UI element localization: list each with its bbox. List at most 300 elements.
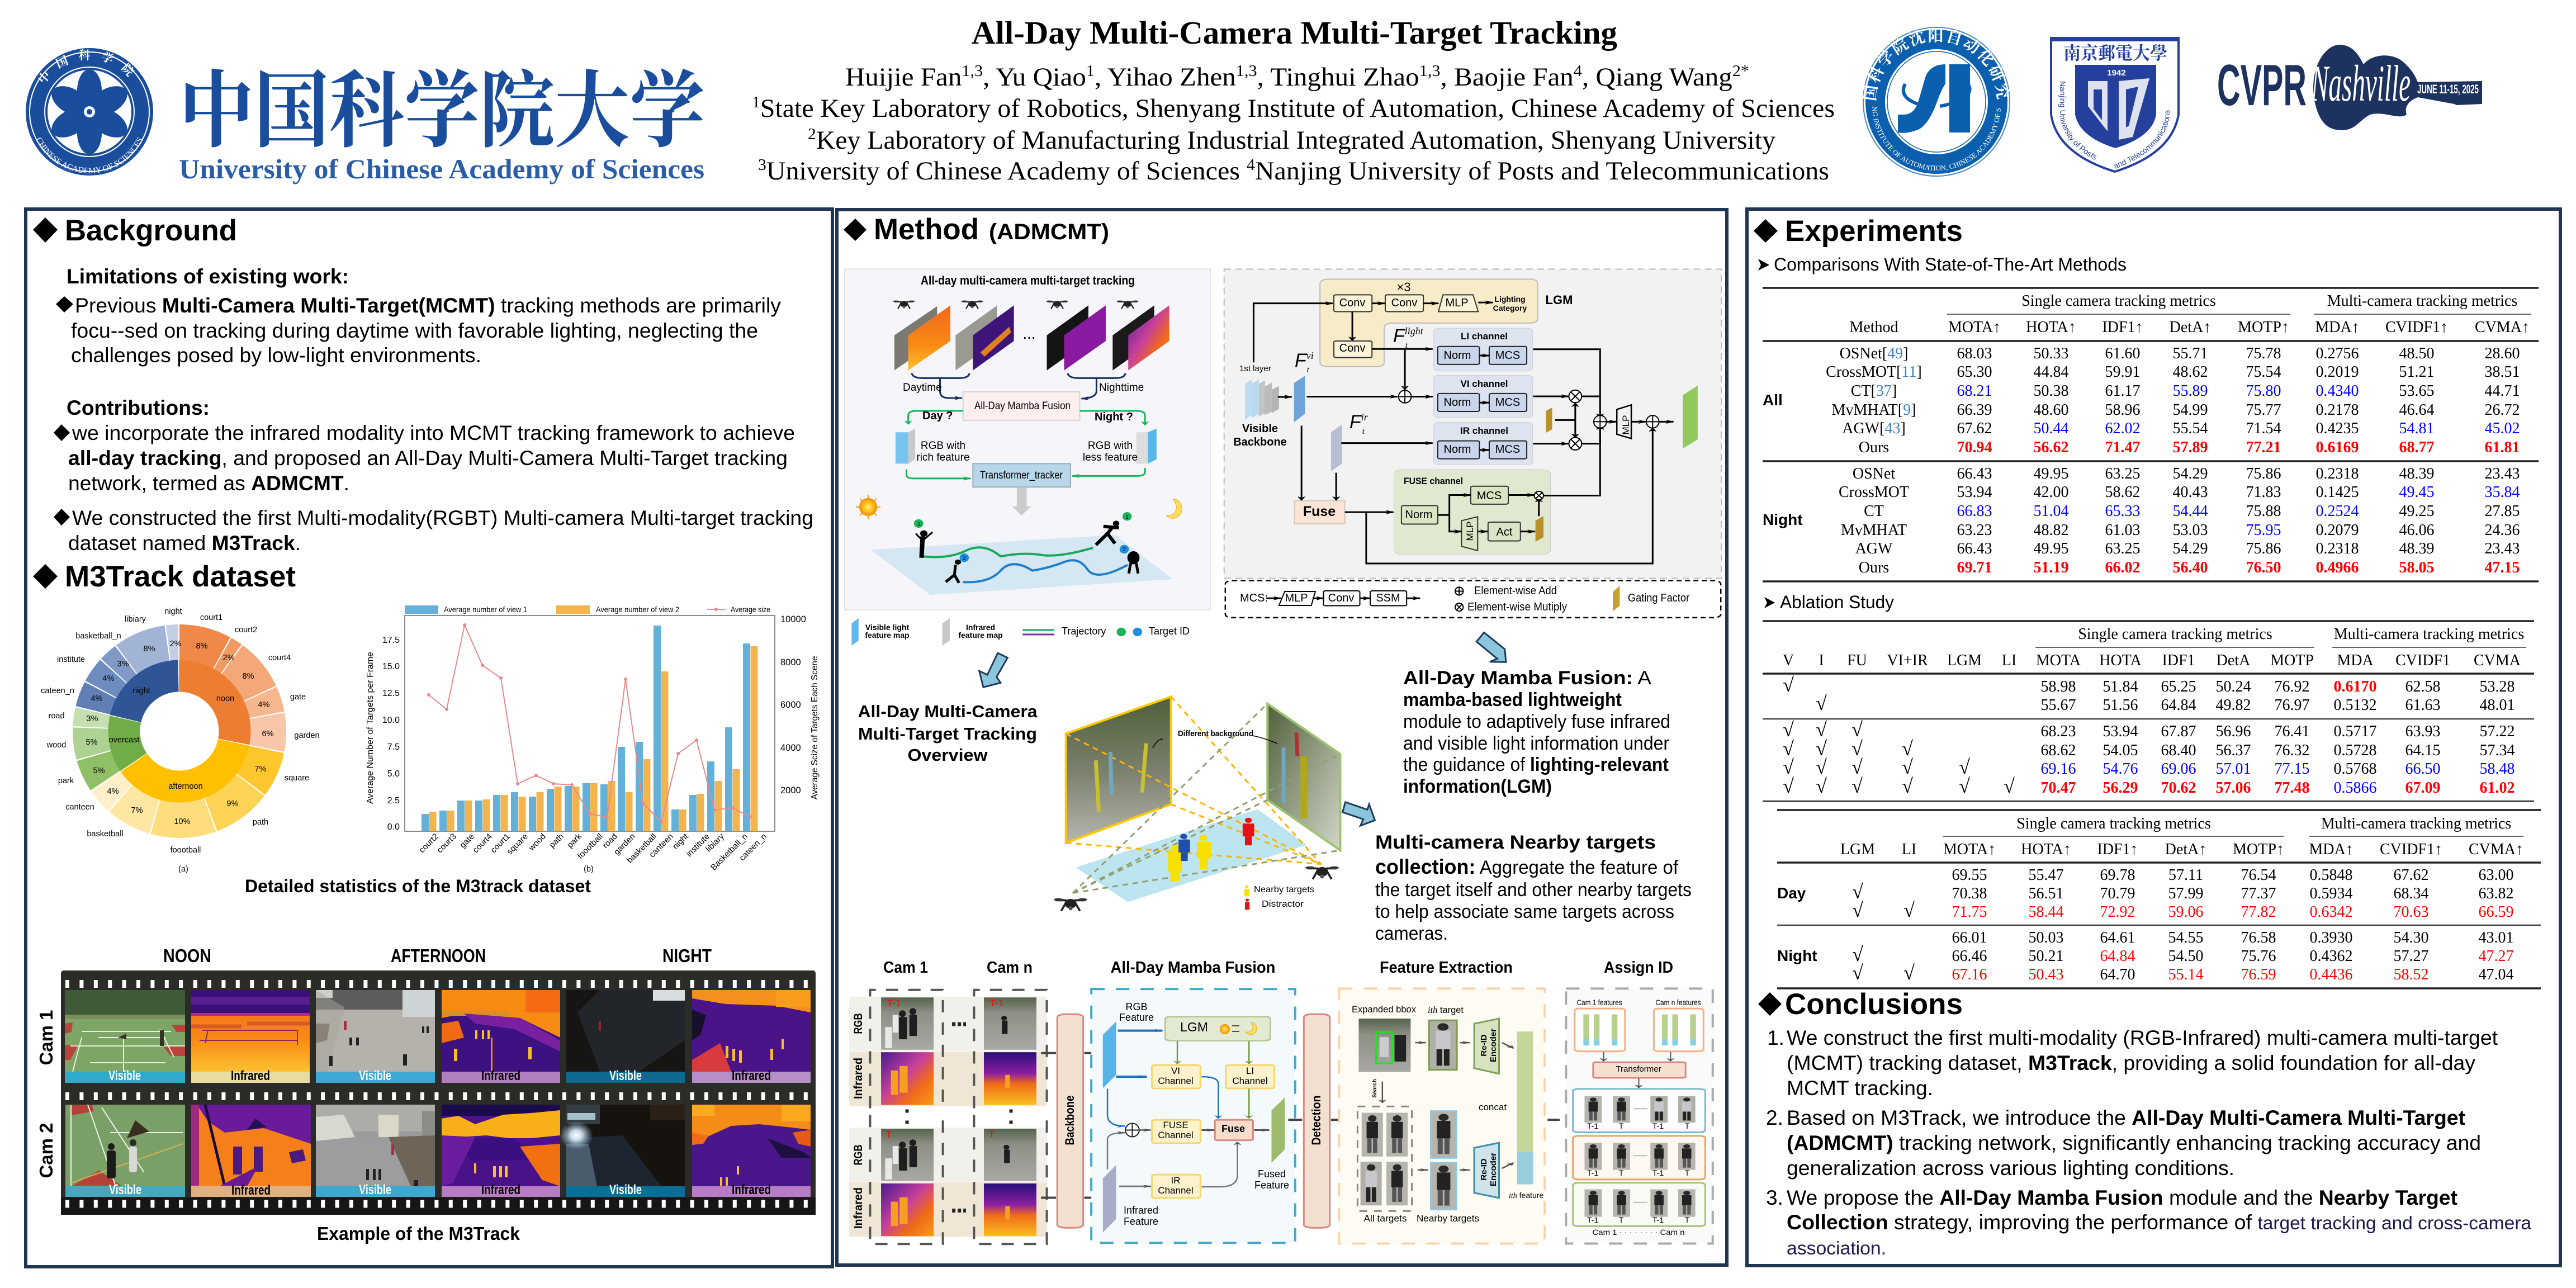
table: comparisons with state of the art: Night xyxy=(1763,511,1803,528)
affiliation 3 and 4: 3 xyxy=(758,156,766,174)
chart: scene donut: court1 xyxy=(200,613,222,622)
text: mamba fusion description: module to adaptively fuse infrared xyxy=(1403,711,1670,732)
table: comparisons with state of the art: 66.43 xyxy=(1957,465,1992,482)
chart: scene donut: night xyxy=(132,686,150,695)
table: comparisons with state of the art: CrossMOT[11] xyxy=(1826,363,1922,381)
chart: scene donut: noon xyxy=(216,694,234,703)
text: conclusions list: 1. xyxy=(1767,1026,1784,1049)
table: comparisons with state of the art: 50.38 xyxy=(2034,382,2068,400)
table: comparisons with state of the art: CVIDF1↑ xyxy=(2385,319,2448,336)
table: ablation study: 70.62 xyxy=(2161,779,2196,797)
chart: targets per scene bars: night xyxy=(671,831,690,851)
table: day and night: 54.55 xyxy=(2168,929,2204,946)
table: comparisons with state of the art: 66.83 xyxy=(1957,503,1992,520)
table: day and night: √ xyxy=(1852,943,1863,965)
chart: scene donut: court4 xyxy=(268,654,291,662)
chart: scene donut: 10% xyxy=(174,817,191,826)
table: day and night: √ xyxy=(1852,899,1863,921)
diagram: nearby targets geometry: Different background xyxy=(1178,729,1253,738)
diagram: all-day overview: rich feature xyxy=(916,452,970,463)
table: day and night: LGM xyxy=(1840,841,1875,858)
diagram: network architecture: Lighting xyxy=(1494,295,1526,304)
table: day and night: √ xyxy=(1903,899,1915,921)
table: comparisons with state of the art: 53.03 xyxy=(2172,522,2208,539)
text: mamba fusion description xyxy=(1403,667,1670,797)
table: comparisons with state of the art: 51.04 xyxy=(2034,503,2068,520)
photo: cam 1 afternoon infrared: Infrared xyxy=(481,1068,520,1083)
table: day and night: 71.75 xyxy=(1952,903,1987,921)
table: comparisons with state of the art: 38.51 xyxy=(2484,363,2520,381)
text: conclusions list: generalization across various lighting conditions. xyxy=(1787,1157,2234,1180)
table: comparisons with state of the art: 75.54 xyxy=(2246,363,2281,381)
table: day and night: 66.59 xyxy=(2479,903,2513,921)
diagram: feature extraction: Re-ID xyxy=(1479,1158,1489,1181)
chart: scene donut: 4% xyxy=(91,694,103,703)
table: comparisons with state of the art: Multi-camera tracking metrics xyxy=(2327,292,2517,310)
table: comparisons with state of the art: 58.96 xyxy=(2105,401,2140,419)
header xyxy=(26,15,2482,186)
chart: targets per scene bars xyxy=(366,605,820,874)
heading: Method xyxy=(844,213,1109,246)
column labels: time of day: NOON xyxy=(163,945,211,966)
text: nearby targets description: collection: Aggregate the feature of xyxy=(1375,855,1679,878)
affiliation 2: 2 xyxy=(808,125,816,143)
diagram: network architecture: LI channel xyxy=(1461,331,1508,342)
diagram: feature extraction: Expanded bbox xyxy=(1352,1004,1416,1015)
photo: cam 2 noon visible xyxy=(65,1105,185,1197)
table: comparisons with state of the art: 75.88 xyxy=(2246,503,2281,520)
chart: targets per scene bars: court1 xyxy=(489,832,512,855)
affiliation 3 and 4: University of Chinese Academy of Sciences xyxy=(766,157,1247,186)
table: comparisons with state of the art: CrossMOT xyxy=(1839,484,1909,501)
diagram: network architecture: Conv xyxy=(1339,297,1365,309)
photo: cam 1 night infrared: Infrared xyxy=(732,1068,771,1083)
logo: Nanjing University of Posts and Telecommunications: Nanjing University of Posts xyxy=(2058,82,2096,160)
table: ablation study: √ xyxy=(1852,718,1863,741)
table: comparisons with state of the art: 44.84 xyxy=(2034,363,2068,381)
table: ablation study: 48.01 xyxy=(2480,697,2515,714)
chart: scene donut: overcast xyxy=(109,736,139,745)
table: comparisons with state of the art: 24.36 xyxy=(2484,522,2520,539)
table: ablation study: √ xyxy=(1959,756,1970,778)
photo: cam 2 night visible xyxy=(560,1105,685,1197)
diagram: all-day overview: less feature xyxy=(1083,452,1138,463)
table: day and night: 0.5934 xyxy=(2310,885,2352,902)
arrow: to overview xyxy=(979,653,1007,687)
table: ablation study: 65.25 xyxy=(2161,678,2196,695)
table: day and night: 67.62 xyxy=(2394,866,2428,884)
column labels: time of day: NIGHT xyxy=(662,945,712,966)
table: comparisons with state of the art: 67.62 xyxy=(1957,420,1992,437)
logo: Nanjing University of Posts and Telecommunications: 南京郵電大學 xyxy=(2063,43,2167,63)
text: mamba fusion description: the guidance of lighting-relevant xyxy=(1403,754,1669,775)
table: comparisons with state of the art: CT[37] xyxy=(1851,382,1897,400)
diagram: feature extraction: concat xyxy=(1479,1102,1507,1112)
logo: UCAS emblem: 中国科学院 xyxy=(38,49,134,82)
table: comparisons with state of the art: Ours xyxy=(1859,559,1889,576)
table: ablation study: 50.24 xyxy=(2216,678,2251,695)
table: comparisons with state of the art: 0.2524 xyxy=(2315,503,2359,520)
authors: , Tinghui Zhao xyxy=(1257,63,1419,92)
table: comparisons with state of the art: 70.94 xyxy=(1957,439,1992,456)
table: day and night: 69.78 xyxy=(2100,866,2135,884)
table: ablation study: 68.62 xyxy=(2040,742,2076,759)
table: day and night: √ xyxy=(1903,962,1915,984)
diagram: network architecture: Category xyxy=(1493,304,1527,312)
table: ablation study: 57.22 xyxy=(2480,723,2515,740)
text: contributions: dataset named M3Track. xyxy=(68,532,301,555)
chart: targets per scene bars: 4000 xyxy=(780,743,801,753)
table: ablation study: 57.06 xyxy=(2216,779,2251,797)
table: comparisons with state of the art: MvMHAT xyxy=(1841,522,1907,539)
diagram: network architecture: Norm xyxy=(1444,396,1471,409)
column labels: time of day xyxy=(163,945,712,966)
subheading: ablation study: Ablation Study xyxy=(1780,592,1894,612)
diagram: all-day overview: Infrared xyxy=(966,623,995,632)
table: ablation study: 51.56 xyxy=(2103,697,2138,714)
diagram: all-day overview xyxy=(845,269,1210,646)
table: ablation study: 68.23 xyxy=(2040,723,2076,740)
table: ablation study: 56.96 xyxy=(2216,723,2251,740)
chart: targets per scene bars: foootball xyxy=(576,832,605,861)
diagram: all-day overview: Target ID xyxy=(1149,626,1190,637)
table: day and night: 77.82 xyxy=(2241,903,2276,921)
diagram: assign ID: T xyxy=(1619,1121,1624,1130)
table: ablation study: 66.50 xyxy=(2405,760,2441,778)
chart: targets per scene bars: wood xyxy=(527,832,548,853)
table: ablation study: √ xyxy=(1816,756,1827,778)
table: comparisons with state of the art: Method xyxy=(1849,319,1898,336)
diagram: pipeline headings: Cam n xyxy=(987,959,1033,977)
diagram: assign ID: Cam 1 features xyxy=(1576,998,1622,1007)
table: day and night: 55.47 xyxy=(2028,866,2064,884)
table: ablation study: 76.32 xyxy=(2274,742,2310,759)
legend: MCS and operators: Conv xyxy=(1328,592,1354,604)
caption: detailed statistics: Detailed statistics of the M3track dataset xyxy=(245,876,591,896)
heading: Conclusions: Conclusions xyxy=(1785,988,1963,1021)
diagram: assign ID: T xyxy=(1685,1168,1690,1177)
text: conclusions list: (ADMCMT) tracking network, significantly enhancing tracking accuracy and xyxy=(1787,1131,2481,1154)
table: ablation study: 0.5728 xyxy=(2333,742,2377,759)
table: day and night: 57.27 xyxy=(2394,948,2428,965)
diagram: all-day overview: Nighttime xyxy=(1099,382,1144,394)
diagram: all-day mamba fusion: Channel xyxy=(1158,1185,1194,1196)
diagram: all-day mamba fusion: LI xyxy=(1246,1066,1254,1076)
diagram: network architecture: Norm xyxy=(1444,443,1471,456)
table: comparisons with state of the art: 68.77 xyxy=(2399,439,2434,456)
diagram: feature extraction: Re-ID xyxy=(1479,1034,1489,1057)
chart: targets per scene bars: 10000 xyxy=(780,614,806,624)
diagram: assign ID: T-1 xyxy=(1652,1215,1664,1224)
table: ablation study: √ xyxy=(1783,737,1794,760)
table: ablation study: 53.28 xyxy=(2480,678,2515,695)
diagram: nearby targets geometry: Nearby targets xyxy=(1254,885,1314,894)
table: comparisons with state of the art: 48.62 xyxy=(2172,363,2208,381)
chart: scene donut: 3% xyxy=(117,660,129,669)
table: day and night: 70.79 xyxy=(2100,885,2135,902)
diagram: network architecture: MCS xyxy=(1477,490,1502,502)
table: comparisons with state of the art: 49.45 xyxy=(2399,484,2434,501)
diagram: all-day overview: 1 xyxy=(1125,514,1129,520)
text: limitations of existing work: Limitations of existing work: xyxy=(67,265,349,288)
table: ablation study: 76.97 xyxy=(2274,697,2310,714)
chart: targets per scene bars: 6000 xyxy=(780,700,801,710)
chart: scene donut: (a) xyxy=(178,865,188,874)
diagram: input camera images xyxy=(849,990,1047,1244)
table: day and night: 47.27 xyxy=(2479,948,2513,965)
table: ablation study: IDF1 xyxy=(2162,652,2195,669)
diagram: all-day overview: feature map xyxy=(958,631,1003,640)
diagram: assign ID: Cam n features xyxy=(1656,998,1701,1007)
authors: 1,3 xyxy=(1236,62,1257,80)
table: ablation study: 0.5768 xyxy=(2333,760,2377,778)
table: comparisons with state of the art: Ours xyxy=(1859,439,1889,456)
table: comparisons with state of the art: 48.39 xyxy=(2399,465,2434,482)
chart: targets per scene bars: 17.5 xyxy=(382,636,400,645)
table: day and night: MOTA↑ xyxy=(1943,841,1996,858)
photo: cam 2 afternoon visible: Visible xyxy=(359,1182,391,1197)
chart: targets per scene bars: 15.0 xyxy=(382,662,400,671)
table: ablation study: 51.84 xyxy=(2103,678,2138,695)
chart: scene donut: 5% xyxy=(86,738,98,747)
table: comparisons with state of the art: 55.54 xyxy=(2172,420,2208,437)
table: ablation study: LI xyxy=(2002,652,2016,669)
table: comparisons with state of the art: OSNet[49] xyxy=(1840,345,1908,362)
table: comparisons with state of the art: 75.86 xyxy=(2246,465,2281,482)
photo: cam 2 noon infrared: Infrared xyxy=(231,1183,271,1198)
table: day and night: MDA↑ xyxy=(2309,841,2354,858)
diagram: pipeline headings: All-Day Mamba Fusion xyxy=(1110,959,1276,977)
table: day and night xyxy=(1777,810,2541,988)
table: day and night: 0.6342 xyxy=(2310,903,2352,921)
diagram: input camera images: RGB xyxy=(852,1013,865,1034)
table: comparisons with state of the art: 66.02 xyxy=(2105,559,2140,576)
chart: targets per scene bars: road xyxy=(601,832,619,850)
text: contributions: We constructed the first Multi-modality(RGBT) Multi-camera Multi-target tracking xyxy=(72,506,813,529)
diagram: all-day mamba fusion xyxy=(1091,989,1295,1243)
table: comparisons with state of the art: 61.03 xyxy=(2105,522,2140,539)
affiliation 2: Key Laboratory of Manufacturing Industrial Integrated Automation, Shenyang University xyxy=(816,126,1776,155)
table: ablation study: √ xyxy=(1902,756,1913,778)
diagram: network architecture: Act xyxy=(1497,526,1513,538)
text: conclusions list: We construct the first multi-modality (RGB-Infrared) multi-camera multi-target xyxy=(1787,1026,2498,1049)
table: comparisons with state of the art: 55.71 xyxy=(2172,345,2208,362)
legend: MCS and operators: MLP xyxy=(1285,592,1308,604)
diagram: network architecture: Visible xyxy=(1242,423,1278,435)
text: limitations of existing work: Previous Multi-Camera Multi-Target(MCMT) tracking methods are primarily xyxy=(75,294,782,317)
film strip: example images xyxy=(61,970,816,1215)
table: comparisons with state of the art: 53.94 xyxy=(1957,484,1992,501)
table: ablation study: 56.37 xyxy=(2216,742,2251,759)
diagram: assign ID: T xyxy=(1685,1215,1690,1224)
table: day and night: 70.38 xyxy=(1952,885,1987,902)
table: ablation study: 57.01 xyxy=(2216,760,2251,778)
table: day and night: 47.04 xyxy=(2479,966,2513,983)
table: comparisons with state of the art: 48.82 xyxy=(2034,522,2068,539)
table: ablation study: 67.09 xyxy=(2405,779,2441,797)
chart: scene donut: 8% xyxy=(243,672,254,681)
text: limitations of existing work xyxy=(56,265,782,367)
logo: Nanjing University of Posts and Telecommunications: and Telecommunications xyxy=(2114,110,2170,169)
panel: method xyxy=(837,210,1727,1265)
table: comparisons with state of the art: 26.72 xyxy=(2484,401,2520,419)
diagram: all-day overview: 2 xyxy=(963,555,966,561)
table: ablation study: 69.06 xyxy=(2161,760,2196,778)
text: mamba fusion description: All-Day Mamba Fusion: A xyxy=(1403,667,1651,689)
table: comparisons with state of the art: CT xyxy=(1864,503,1884,520)
text: mamba fusion description: and visible light information under xyxy=(1403,733,1669,754)
table: day and night: 63.00 xyxy=(2479,866,2513,884)
photo: cam 1 afternoon visible xyxy=(316,990,435,1083)
diagram: all-day mamba fusion: Channel xyxy=(1158,1076,1194,1086)
diagram: input camera images: T-1 xyxy=(887,998,901,1008)
diagram: feature extraction: ith target xyxy=(1428,1005,1464,1015)
chart: scene donut: 5% xyxy=(93,766,105,775)
table: day and night: 57.11 xyxy=(2168,866,2203,884)
table: day and night: 50.03 xyxy=(2028,929,2064,946)
chart: targets per scene bars: 7.5 xyxy=(387,742,400,752)
diagram: all-day mamba fusion: Channel xyxy=(1232,1076,1268,1086)
chart: targets per scene bars: institute xyxy=(684,832,712,859)
table: comparisons with state of the art: 0.4340 xyxy=(2315,382,2359,400)
chart: scene donut: 4% xyxy=(107,787,119,796)
diagram: all-day overview: Trajectory xyxy=(1062,626,1106,637)
diagram: all-day overview: Transformer_tracker xyxy=(980,470,1063,481)
photo: cam 1 noon infrared: Infrared xyxy=(231,1068,270,1083)
table: comparisons with state of the art: 61.60 xyxy=(2105,345,2140,362)
table: day and night: 50.21 xyxy=(2028,948,2064,965)
table: ablation study: √ xyxy=(1816,775,1827,797)
chart: scene donut: canteen xyxy=(65,803,94,812)
authors: , Qiang Wang xyxy=(1582,63,1732,92)
chart: scene donut: basketball xyxy=(87,830,124,839)
logo: Nanjing University of Posts and Telecommunications: 1942 xyxy=(2107,68,2126,78)
chart: targets per scene bars: 8000 xyxy=(780,657,801,667)
chart: scene donut: 4% xyxy=(258,700,270,709)
table: ablation study: √ xyxy=(1816,737,1827,760)
table: day and night: 76.54 xyxy=(2241,866,2276,884)
chart: scene donut: 4% xyxy=(103,674,115,683)
table: comparisons with state of the art: AGW xyxy=(1855,540,1893,557)
chart: targets per scene bars: libiary xyxy=(704,831,726,854)
table: day and night: CVIDF1↑ xyxy=(2380,841,2442,858)
table: day and night: 67.16 xyxy=(1952,966,1987,983)
text: overview caption: Multi-Target Tracking xyxy=(858,724,1037,744)
table: comparisons with state of the art: MvMHAT[9] xyxy=(1832,401,1916,419)
diagram: nearby targets geometry xyxy=(1054,697,1340,911)
table: ablation study xyxy=(1763,621,2534,801)
table: ablation study: 77.48 xyxy=(2274,779,2310,797)
diagram: all-day mamba fusion: RGB xyxy=(1125,1001,1148,1012)
table: ablation study: 0.5132 xyxy=(2333,697,2377,714)
table: day and night: 58.52 xyxy=(2394,966,2428,983)
diagram: network architecture: F xyxy=(1393,325,1405,347)
table: ablation study: 63.93 xyxy=(2405,723,2441,740)
legend: MCS and operators: SSM xyxy=(1376,592,1400,604)
panel: experiments and conclusions xyxy=(1747,209,2560,1266)
table: ablation study: V xyxy=(1783,652,1794,669)
diagram: network architecture: light xyxy=(1405,325,1424,337)
table: day and night: √ xyxy=(1852,880,1863,903)
chart: targets per scene bars: canteen xyxy=(647,832,675,860)
diagram: network architecture: FUSE channel xyxy=(1404,476,1463,486)
chart: targets per scene bars: court2 xyxy=(417,832,441,855)
table: comparisons with state of the art: 46.64 xyxy=(2399,401,2434,419)
table: ablation study: DetA xyxy=(2217,652,2251,669)
text: overview caption: Overview xyxy=(908,745,988,765)
table: ablation study: MOTP xyxy=(2270,652,2314,669)
diagram: all-day mamba fusion: Feature xyxy=(1254,1180,1289,1191)
chart: scene donut: 2% xyxy=(223,654,235,662)
table: comparisons with state of the art: 28.60 xyxy=(2484,345,2520,362)
table: day and night: 77.37 xyxy=(2241,885,2276,902)
table: comparisons with state of the art: 0.2318 xyxy=(2315,540,2359,557)
photo: cam 1 afternoon visible: Visible xyxy=(359,1068,391,1083)
table: day and night: 59.06 xyxy=(2168,903,2204,921)
logo: UCAS emblem xyxy=(26,48,153,176)
table: day and night: 0.4362 xyxy=(2310,948,2352,965)
table: comparisons with state of the art: 62.02 xyxy=(2105,420,2140,437)
diagram: feature extraction: Encoder xyxy=(1489,1029,1498,1062)
diagram: assign ID xyxy=(1547,988,1713,1243)
diagram: network architecture: MCS xyxy=(1495,443,1520,456)
table: comparisons with state of the art: 23.43 xyxy=(2484,540,2520,557)
diagram: network architecture: Norm xyxy=(1405,509,1432,521)
table: comparisons with state of the art: 56.40 xyxy=(2172,559,2208,576)
photo: cam 1 night visible: Visible xyxy=(609,1068,642,1083)
table: ablation study: 0.5717 xyxy=(2333,723,2377,740)
diagram: all-day overview: ... xyxy=(1022,325,1036,342)
authors: , Yu Qiao xyxy=(983,63,1086,92)
table: ablation study: 0.6170 xyxy=(2333,678,2377,695)
diagram: all-day overview: All-Day Mamba Fusion xyxy=(974,400,1071,412)
table: day and night: 55.14 xyxy=(2168,966,2204,983)
table: comparisons with state of the art: 0.4966 xyxy=(2315,559,2359,576)
table: day and night: 64.84 xyxy=(2100,948,2135,965)
heading: Method: (ADMCMT) xyxy=(989,220,1109,244)
text: contributions: Contributions: xyxy=(67,396,210,419)
table: day and night: HOTA↑ xyxy=(2021,841,2071,858)
table: ablation study: 77.15 xyxy=(2274,760,2310,778)
table: day and night: 43.01 xyxy=(2479,929,2513,946)
diagram: all-day overview: Night ? xyxy=(1095,411,1133,423)
logo: Nanjing University of Posts and Telecommunications xyxy=(2050,37,2180,173)
table: ablation study: 69.16 xyxy=(2040,760,2076,778)
diagram: all-day overview: RGB with xyxy=(1088,440,1133,452)
table: comparisons with state of the art: 75.86 xyxy=(2246,540,2281,557)
diagram: all-day mamba fusion: FUSE xyxy=(1163,1120,1188,1130)
diagram: assign ID: T xyxy=(1619,1168,1624,1177)
chart: targets per scene bars: court3 xyxy=(435,832,458,855)
table: day and night: 70.63 xyxy=(2394,903,2428,921)
table: comparisons with state of the art: 46.06 xyxy=(2399,522,2434,539)
diagram: network architecture: VI channel xyxy=(1460,378,1508,389)
chart: targets per scene bars: (b) xyxy=(584,865,594,874)
table: comparisons with state of the art: 59.91 xyxy=(2105,363,2140,381)
text: conclusions list: association. xyxy=(1787,1238,1886,1258)
table: ablation study: MDA xyxy=(2337,652,2374,669)
title: All-Day Multi-Camera Multi-Target Tracking xyxy=(972,15,1617,51)
table: comparisons with state of the art: 76.50 xyxy=(2246,559,2281,576)
diagram: assign ID: T-1 xyxy=(1587,1121,1598,1130)
text: limitations of existing work: focu--sed on tracking during daytime with favorable lighting, neglecting the xyxy=(71,319,758,342)
table: comparisons with state of the art: 45.02 xyxy=(2484,420,2520,437)
diagram: all-day mamba fusion: Feature xyxy=(1119,1012,1154,1023)
chart: scene donut: gate xyxy=(290,693,306,702)
chart: scene donut: square xyxy=(285,774,309,783)
table: comparisons with state of the art: 58.62 xyxy=(2105,484,2140,501)
table: ablation study: 68.40 xyxy=(2161,742,2196,759)
